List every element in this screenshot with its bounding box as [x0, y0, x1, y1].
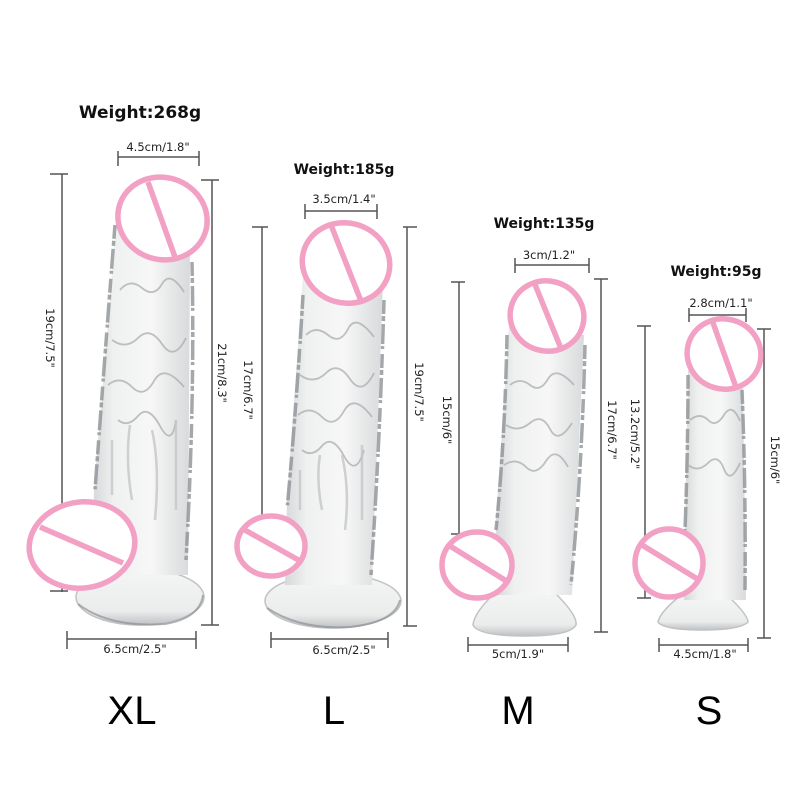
top width: L [305, 192, 377, 219]
censor mark: M top [502, 273, 592, 359]
top width: M [515, 248, 589, 273]
panel: size S [628, 264, 782, 733]
weight: XL: Weight:268g [79, 103, 201, 123]
size label: S: S [696, 689, 722, 733]
right height: M: 17cm/6.7" [605, 400, 619, 460]
bottom width: L: 6.5cm/2.5" [312, 643, 376, 657]
product shape: M [473, 325, 585, 636]
censor mark: XL bottom [24, 495, 140, 595]
weight: S: Weight:95g [670, 264, 762, 280]
top width: XL: 4.5cm/1.8" [126, 140, 190, 154]
left height: XL [43, 174, 68, 592]
size label: L: L [323, 689, 345, 733]
left height: M: 15cm/6" [440, 396, 454, 444]
left height: L [241, 227, 268, 519]
censor mark: M bottom [442, 532, 512, 598]
left height: S: 13.2cm/5.2" [628, 399, 642, 469]
right height: XL [201, 180, 229, 625]
top width: S [689, 296, 753, 322]
panel: size L [237, 162, 426, 733]
left height: M [440, 282, 465, 534]
size label: XL: XL [108, 689, 156, 733]
product shape: S [658, 370, 748, 630]
top width: L: 3.5cm/1.4" [312, 192, 376, 206]
censor mark: S top [679, 311, 769, 397]
left height: L: 17cm/6.7" [241, 360, 255, 420]
censor mark: L bottom [237, 516, 305, 576]
weight: M: Weight:135g [494, 216, 594, 232]
bottom width: L [271, 632, 388, 657]
size label: M: M [501, 689, 535, 733]
panel: size M [440, 216, 619, 733]
right height: L: 19cm/7.5" [412, 362, 426, 422]
right height: L [403, 227, 426, 626]
bottom width: M [468, 637, 568, 661]
censor mark: XL top [107, 166, 218, 271]
top width: XL [118, 140, 199, 166]
right height: M [594, 279, 619, 632]
left height: S [628, 326, 651, 598]
bottom width: S: 4.5cm/1.8" [673, 647, 737, 661]
censor mark: S bottom [635, 529, 703, 597]
bottom width: S [659, 638, 748, 661]
right height: XL: 21cm/8.3" [215, 343, 229, 403]
bottom width: XL: 6.5cm/2.5" [103, 642, 167, 656]
right height: S [757, 329, 782, 638]
top width: M: 3cm/1.2" [523, 248, 575, 262]
censor mark: L top [293, 213, 399, 313]
product shape: L [265, 275, 401, 628]
left height: XL: 19cm/7.5" [43, 308, 57, 368]
right height: S: 15cm/6" [768, 436, 782, 484]
weight: L: Weight:185g [294, 162, 394, 178]
top width: S: 2.8cm/1.1" [689, 296, 753, 310]
panel: size XL [24, 103, 229, 733]
product shape: XL [76, 225, 204, 625]
bottom width: XL [67, 631, 196, 656]
bottom width: M: 5cm/1.9" [492, 647, 544, 661]
